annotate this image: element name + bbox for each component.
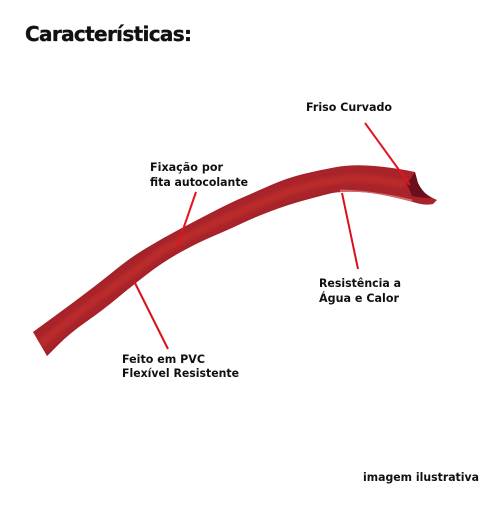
label: feito em PVC flexivel resistente: Flexível Resistente — [122, 366, 239, 380]
label: feito em PVC flexivel resistente: Feito em PVC — [122, 352, 205, 366]
leader line: fixacao — [177, 192, 196, 247]
label: resistencia a agua e calor — [319, 276, 401, 305]
label: friso curvado: Friso Curvado — [306, 100, 392, 114]
note: imagem ilustrativa: imagem ilustrativa — [363, 470, 479, 484]
leader line: resistencia — [342, 193, 358, 269]
label: resistencia a agua e calor: Resistência a — [319, 276, 401, 290]
label: fixacao por fita autocolante: fita autocolante — [150, 175, 248, 189]
leader line: feito em PVC — [134, 281, 168, 349]
label: feito em PVC flexivel resistente — [122, 352, 239, 380]
label: fixacao por fita autocolante: Fixação por — [150, 160, 223, 174]
leader line: friso curvado — [365, 123, 410, 185]
label: fixacao por fita autocolante — [150, 160, 248, 189]
red PVC trim strip — [33, 165, 437, 356]
label: resistencia a agua e calor: Água e Calor — [319, 290, 399, 305]
title: Características: — [25, 22, 192, 46]
